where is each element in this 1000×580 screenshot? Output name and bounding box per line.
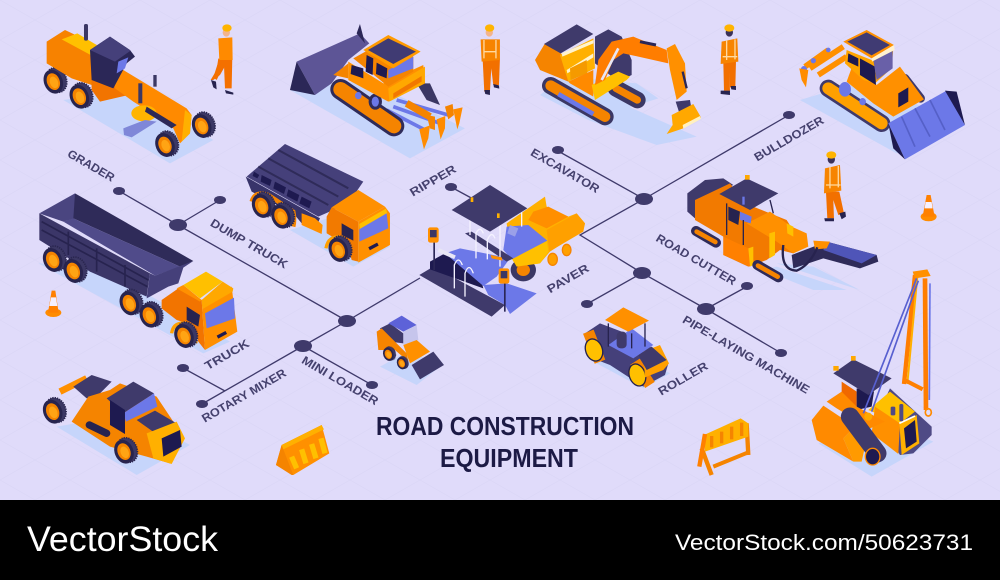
labels: BULLDOZER [752,113,827,164]
worker: ripper [481,24,500,95]
labels: MINI LOADER [299,353,381,408]
machine: pipe-laying machine [812,269,933,477]
labels: PAVER [544,261,592,296]
machine: road cutter [687,175,878,290]
title: EQUIPMENT [440,443,578,473]
labels: DUMP TRUCK [208,216,291,271]
worker: grader [211,24,233,95]
labels: PIPE-LAYING MACHINE [680,313,812,396]
labels [65,113,827,425]
title [376,411,634,473]
footer bar: VectorStock.com/50623731 [675,530,973,555]
machine: roller [582,307,670,388]
barrier: folding sign [699,418,748,475]
flowchart connectors [113,111,795,408]
machine: rotary mixer [39,375,190,475]
machine: mini loader [377,316,444,385]
labels: GRADER [65,147,117,185]
machine: bulldozer [799,30,965,159]
labels: ROTARY MIXER [199,366,289,425]
labels: ROAD CUTTER [653,231,739,288]
worker: excavator [721,24,738,95]
title: ROAD CONSTRUCTION [376,411,634,441]
machine: excavator [535,24,701,145]
labels: ROLLER [656,359,711,398]
machine: grader [40,24,219,163]
labels: EXCAVATOR [528,146,602,196]
barrier: orange block [276,425,329,475]
labels: TRUCK [202,337,252,373]
footer bar [0,500,1000,580]
labels: RIPPER [407,162,459,199]
machine: truck [38,193,237,353]
traffic cone [45,291,61,317]
machine: ripper [290,24,465,158]
machine: paver [419,185,585,317]
machine: dump truck [246,144,390,267]
worker: road cutter [824,151,846,221]
traffic cone [921,195,937,221]
footer bar: VectorStock [27,520,219,559]
